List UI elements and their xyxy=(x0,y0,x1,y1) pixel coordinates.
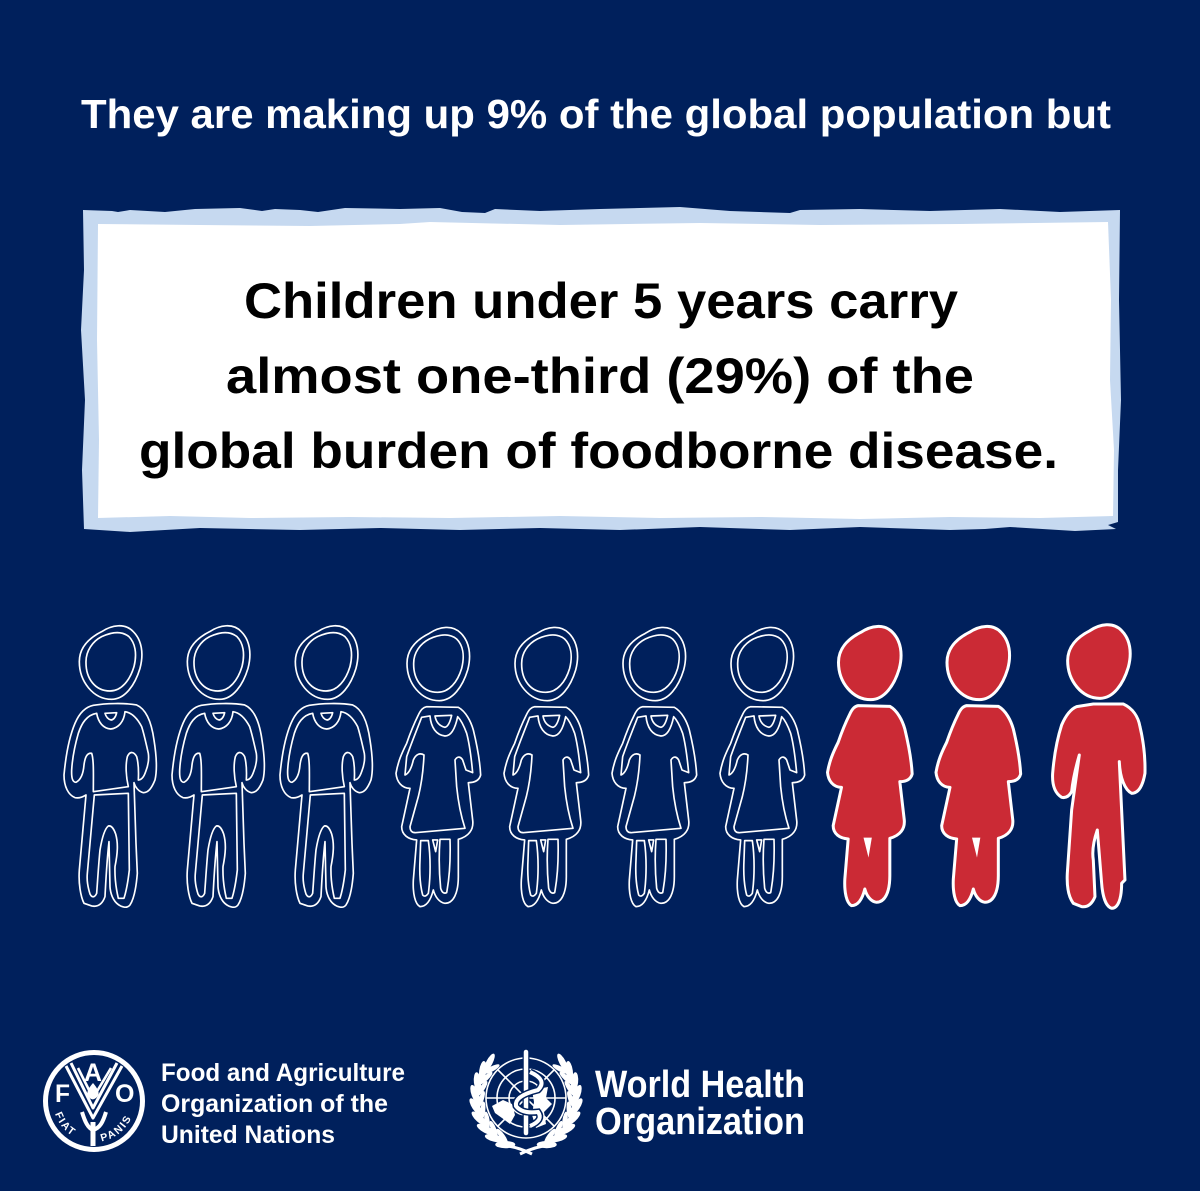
emblem ribbon xyxy=(500,1145,552,1154)
box headline text: almost one-third (29%) of the xyxy=(226,347,974,404)
box headline text: global burden of foodborne disease. xyxy=(139,422,1058,479)
icon: outlined girl 1 xyxy=(396,627,481,907)
emblem laurel right xyxy=(537,1052,585,1148)
logo: WHO wordmark xyxy=(595,1064,805,1143)
logo: FAO wordmark: Organization of the xyxy=(161,1090,388,1118)
emblem serpent xyxy=(516,1072,542,1126)
box white interior xyxy=(97,222,1114,519)
icon: outlined girl 4 xyxy=(720,627,805,907)
icon: outlined boy 1 xyxy=(64,626,156,907)
icon: red girl 2 xyxy=(936,626,1021,906)
icon: outlined boy 3 xyxy=(280,626,372,907)
emblem letters: F xyxy=(55,1080,70,1108)
heading: population statement: They are making up 9% of the global population but xyxy=(81,91,1111,137)
box headline text xyxy=(139,272,1058,479)
emblem globe grid xyxy=(486,1058,566,1138)
emblem laurel left xyxy=(467,1052,515,1148)
icon: outlined girl 2 xyxy=(504,627,589,907)
box headline text: Children under 5 years carry xyxy=(244,272,958,329)
logo: WHO wordmark: Organization xyxy=(595,1101,805,1143)
box rough light-blue border xyxy=(81,207,1121,532)
logo: WHO wordmark: World Health xyxy=(595,1064,805,1106)
emblem staff xyxy=(522,1052,530,1133)
emblem ring xyxy=(46,1052,142,1150)
icon: outlined boy 2 xyxy=(172,626,264,907)
logo: FAO emblem: PANIS xyxy=(100,1116,130,1142)
icon: red girl 1 xyxy=(827,626,912,906)
logo: FAO wordmark: United Nations xyxy=(161,1121,335,1149)
emblem motto: FIAT xyxy=(55,1112,76,1134)
panel: key message box xyxy=(81,207,1121,532)
logo: FAO wordmark xyxy=(161,1059,405,1149)
pictogram: ten children, three in red xyxy=(64,625,1145,908)
logo: FAO emblem xyxy=(43,1050,145,1152)
emblem wheat ear xyxy=(66,1063,122,1146)
emblem drop xyxy=(87,1083,99,1099)
emblem continents xyxy=(492,1100,515,1124)
logo: FAO emblem: A xyxy=(84,1059,102,1087)
logo: WHO emblem xyxy=(467,1052,585,1154)
icon: outlined girl 3 xyxy=(612,627,697,907)
logo: FAO wordmark: Food and Agriculture xyxy=(161,1059,405,1087)
icon: red boy xyxy=(1053,625,1145,908)
logo: FAO emblem: O xyxy=(115,1080,134,1108)
